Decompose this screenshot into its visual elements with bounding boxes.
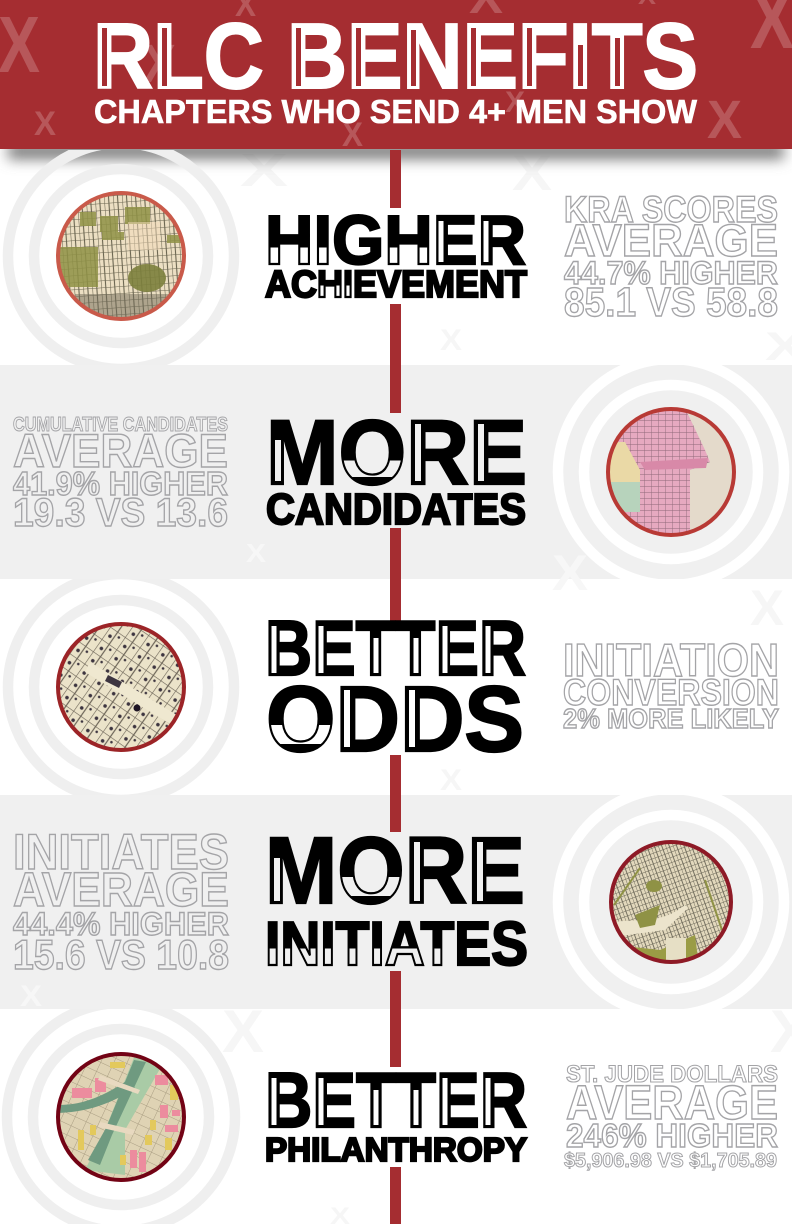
stats: KRA scores [564,189,778,325]
icon: map medallion 1 [8,143,234,369]
heading: higher achievement: ACHIEVEMENT [265,264,527,306]
header watermark X marks: X [505,86,525,119]
stats: initiation conversion [563,634,779,734]
stats: St. Jude dollars: $5,906.98 VS $1,705.89 [564,1150,777,1172]
panel: higher achievement [8,143,778,369]
watermark X marks in the body: X [765,325,792,369]
heading: better odds: BETTER [265,604,526,692]
heading: better odds [265,604,526,771]
header watermark X marks: X [143,34,176,94]
header shadow [8,143,784,159]
header watermark X marks [0,0,792,154]
watermark X marks in the body: X [440,324,462,357]
stats: cumulative candidates: CUMULATIVE CANDIDATES [13,414,228,436]
heading: more initiates: MORE [265,818,525,924]
watermark X marks in the body: X [552,545,588,601]
stats: cumulative candidates: AVERAGE [13,424,228,477]
watermark X marks in the body: X [246,538,267,568]
watermark X marks in the body: X [512,145,552,201]
stats: initiates: INITIATES [13,824,229,880]
header watermark X marks: X [34,105,56,143]
heading: better odds: ODDS [266,667,524,771]
watermark X marks in the body: X [222,998,264,1065]
stats: initiates [13,824,229,978]
stats: initiates: 44.4% HIGHER [13,906,229,942]
heading: better philanthropy: PHILANTHROPY [265,1131,527,1168]
watermark X marks in the body: X [440,764,462,797]
icon: map medallion 2 [558,359,784,585]
icon: map medallion 5 [7,1003,235,1224]
center vertical line [390,150,401,1224]
stats: KRA scores: AVERAGE [564,215,778,266]
stats: St. Jude dollars: 246% HIGHER [566,1117,778,1154]
title: RLC BENEFITS [93,4,698,108]
header watermark X marks: X [342,116,363,154]
heading: more initiates: INITIATES [265,910,528,979]
stats: cumulative candidates [13,414,228,535]
icon: map medallion 4 [558,789,784,1015]
icon: map medallion 3 [8,574,234,800]
heading: more candidates: MORE [266,402,527,504]
watermark X marks in the body: X [20,980,42,1013]
stats: initiates: 15.6 VS 10.8 [13,931,229,978]
heading: higher achievement: HIGHER [265,201,526,279]
stats: KRA scores: 44.7% HIGHER [564,255,778,291]
heading: more candidates: CANDIDATES [266,485,526,534]
panel: more candidates [13,359,784,585]
panel: more initiates [13,789,784,1015]
panel: better odds [8,574,779,800]
panel: better philanthropy [7,1003,778,1224]
heading: better philanthropy [265,1056,527,1168]
header watermark X marks: X [707,90,742,150]
watermark X marks in the body: X [750,580,784,636]
stats: St. Jude dollars [564,1061,778,1172]
stats: initiates: AVERAGE [13,864,229,917]
header banner [0,0,792,154]
stats: cumulative candidates: 41.9% HIGHER [13,465,228,502]
heading: more initiates [265,818,528,979]
watermark X marks in the body: X [240,144,288,196]
heading: better philanthropy: BETTER [265,1056,527,1144]
stats: cumulative candidates: 19.3 VS 13.6 [13,491,228,535]
stats: St. Jude dollars: ST. JUDE DOLLARS [566,1061,778,1088]
subtitle: CHAPTERS WHO SEND 4+ MEN SHOW [94,93,698,130]
